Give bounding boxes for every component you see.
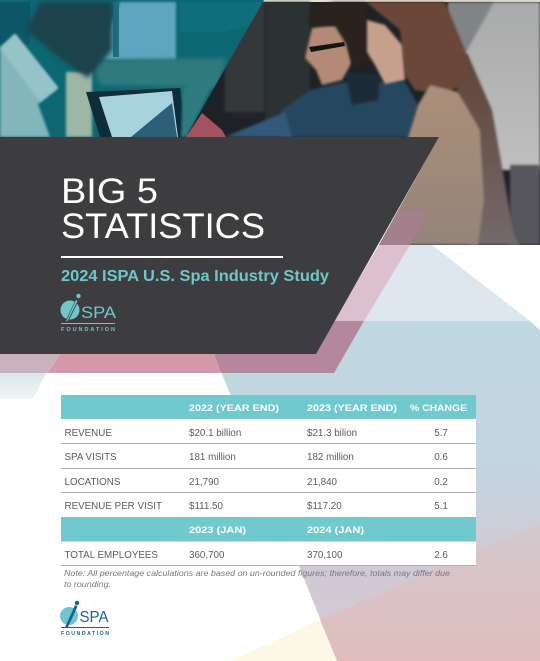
subtitle: 2024 ISPA U.S. Spa Industry Study	[61, 268, 329, 285]
row: revenue per visit: $111.50	[189, 501, 224, 512]
row: revenue per visit: 5.1	[434, 501, 448, 512]
row: spa visits: SPA VISITS	[64, 452, 117, 463]
row: spa visits: 0.6	[434, 452, 448, 463]
row: revenue per visit: $117.20	[307, 501, 342, 512]
woman's back hair	[456, 52, 520, 245]
row: spa visits	[64, 452, 448, 463]
row: total employees: TOTAL EMPLOYEES	[64, 550, 158, 561]
table header: year end: 2023 (YEAR END)	[307, 403, 397, 414]
row: locations: 21,840	[307, 477, 338, 488]
row: total employees: 360,700	[189, 550, 225, 561]
woman	[366, 2, 468, 95]
footnote: to rounding.	[64, 580, 111, 589]
row: locations	[64, 477, 448, 488]
table header: january: 2023 (JAN)	[189, 525, 246, 536]
table header: january	[61, 517, 476, 542]
table header: year end: % CHANGE	[410, 403, 468, 414]
row: spa visits: 182 million	[307, 452, 354, 463]
row: revenue per visit: REVENUE PER VISIT	[64, 501, 162, 512]
row: spa visits: 181 million	[189, 452, 236, 463]
title	[61, 171, 265, 246]
title rule	[61, 256, 283, 258]
row: total employees: 370,100	[307, 550, 343, 561]
table header: year end	[61, 395, 476, 419]
logo: ISPA Foundation, blue: FOUNDATION	[61, 631, 109, 637]
hero photo: colleagues reviewing a laptop	[0, 0, 540, 245]
row: total employees: 2.6	[434, 550, 448, 561]
footnote: Note: All percentage calculations are based on un-rounded figures; therefore, totals may differ due	[64, 569, 451, 578]
row: revenue	[64, 428, 448, 439]
row: total employees	[64, 550, 448, 561]
table header: january: 2024 (JAN)	[307, 525, 364, 536]
table header: year end: 2022 (YEAR END)	[189, 403, 279, 414]
logo: ISPA Foundation, blue: SPA	[80, 609, 109, 626]
logo: ISPA Foundation, blue	[60, 601, 109, 637]
row: revenue: 5.7	[434, 428, 448, 439]
dark title panel	[0, 137, 439, 354]
logo: ISPA Foundation, teal: FOUNDATION	[61, 327, 115, 333]
teal tinted left section	[0, 0, 270, 137]
row: locations: LOCATIONS	[64, 477, 121, 488]
statistics table	[61, 395, 476, 566]
row: revenue per visit	[64, 501, 448, 512]
title: STATISTICS	[61, 206, 265, 246]
row: locations: 0.2	[434, 477, 448, 488]
row: locations: 21,790	[189, 477, 220, 488]
decorative geometric background	[0, 245, 540, 661]
title: BIG 5	[61, 171, 158, 211]
row: revenue: $21.3 bilion	[307, 428, 357, 439]
logo: ISPA Foundation, teal	[60, 294, 117, 333]
man in denim shirt	[280, 82, 418, 137]
logo: ISPA Foundation, teal: SPA	[81, 303, 117, 322]
background wall	[225, 2, 265, 112]
footnote	[64, 569, 451, 589]
row: revenue: $20.1 billion	[189, 428, 241, 439]
row: revenue: REVENUE	[64, 428, 112, 439]
